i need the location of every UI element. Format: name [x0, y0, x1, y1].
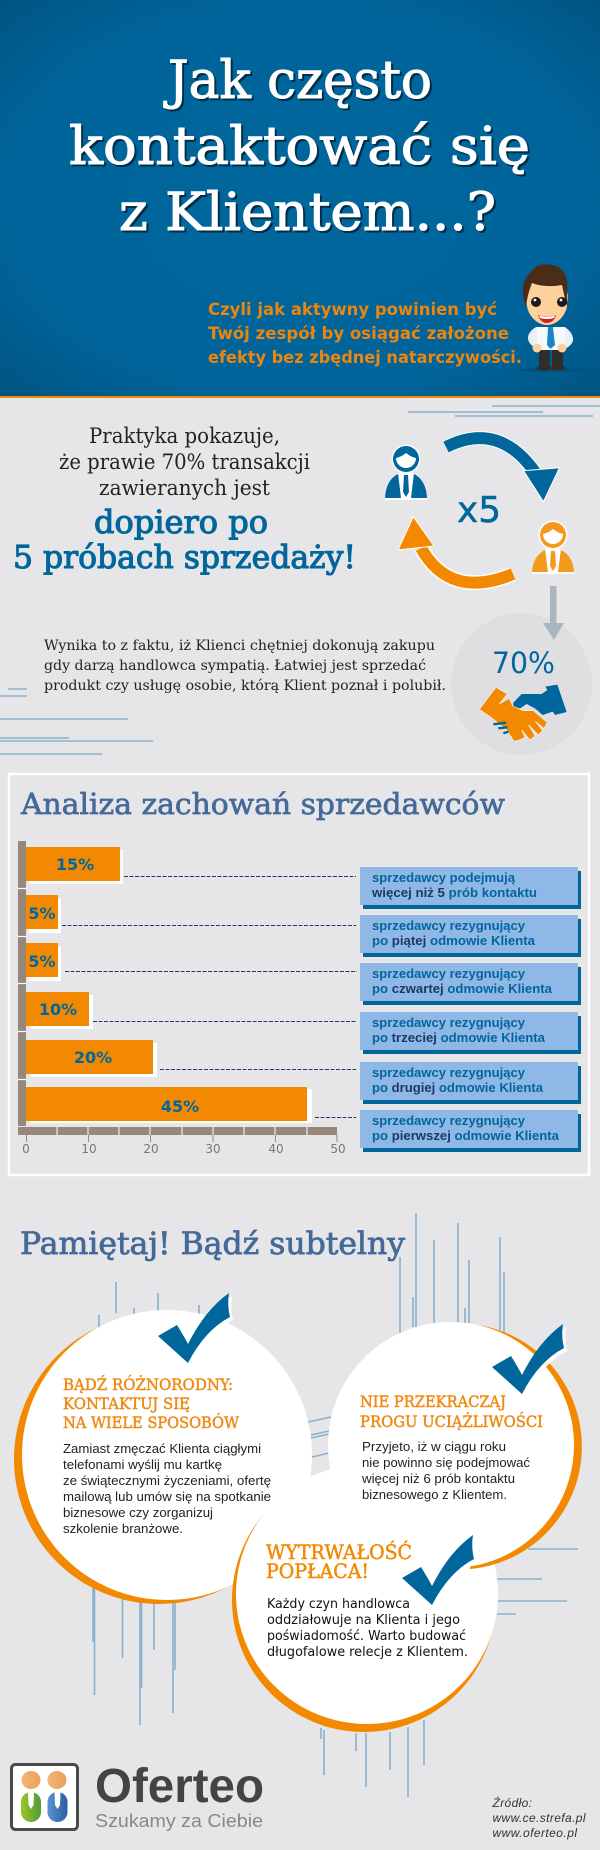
- bubble 1 text: ze świątecznymi życzeniami, ofertę: [63, 1473, 271, 1488]
- source note: Źródło:: [492, 1795, 532, 1810]
- bubble 3 text: długofalowe relecje z Klientem.: [267, 1645, 468, 1660]
- bubble 1 text: telefonami wyślij mu kartkę: [63, 1457, 222, 1472]
- source note: [492, 1795, 586, 1840]
- intro text: zawieranych jest: [99, 476, 271, 500]
- bar chart: 20%: [74, 1048, 112, 1067]
- icon: orange person: [532, 520, 574, 574]
- bubble 3 text: WYTRWAŁOŚĆ: [266, 1539, 412, 1564]
- icon: check mark 1: [158, 1293, 233, 1366]
- 70 percent label: 70%: [492, 646, 555, 680]
- title: Jak często: [163, 51, 432, 111]
- legend boxes: więcej niż 5 prób kontaktu: [371, 885, 537, 900]
- bubble 1 text: mailową lub umów się na spotkanie: [63, 1489, 271, 1504]
- title: [69, 51, 530, 243]
- bar chart: 0: [22, 1142, 30, 1156]
- bubble 2 text: nie powinno się podejmować: [362, 1455, 530, 1470]
- logo wordmark: Oferteo: [95, 1760, 264, 1813]
- bubble 1 text: [63, 1374, 271, 1536]
- bubble 3 text: POPŁACA!: [266, 1559, 369, 1583]
- explanation paragraph: produkt czy usługę osobie, którą Klient poznał i polubił.: [44, 678, 446, 694]
- bar chart: 15%: [56, 855, 94, 874]
- arrow: orange curved: [398, 517, 513, 583]
- bubble: prog uciazliwosci background: [328, 1322, 582, 1569]
- subtitle: [208, 300, 522, 367]
- bubble: rozne sposoby: [14, 1310, 312, 1604]
- source note: www.oferteo.pl: [492, 1826, 577, 1840]
- legend boxes: po pierwszej odmowie Klienta: [372, 1128, 560, 1143]
- logo icon: [12, 1764, 78, 1830]
- header banner: [0, 0, 600, 398]
- bar chart: [18, 841, 357, 1156]
- intro text: [59, 424, 310, 500]
- legend boxes: po czwartej odmowie Klienta: [372, 981, 553, 996]
- bubble 1 text: KONTAKTUJ SIĘ: [63, 1394, 190, 1413]
- bubble 2 text: Przyjeto, iż w ciągu roku: [362, 1439, 506, 1454]
- bubble 3 text: poświadomość. Warto budować: [267, 1629, 466, 1644]
- bubble 3 text: oddziałowuje na Klienta i jego: [267, 1613, 460, 1628]
- legend boxes: sprzedawcy rezygnujący: [372, 966, 526, 981]
- panel: analiza zachowan: [9, 774, 589, 1175]
- subtitle: efekty bez zbędnej natarczywości.: [208, 348, 522, 367]
- bar chart: 10%: [39, 1000, 77, 1019]
- legend boxes: sprzedawcy rezygnujący: [372, 1113, 526, 1128]
- bubble 2 text: NIE PRZEKRACZAJ: [360, 1392, 506, 1411]
- explanation paragraph: gdy darzą handlowca sympatią. Łatwiej jest sprzedać: [44, 658, 426, 674]
- bubble 1 text: NA WIELE SPOSOBÓW: [63, 1412, 240, 1432]
- x5 label: x5: [457, 490, 501, 531]
- subtitle: Czyli jak aktywny powinien być: [208, 300, 497, 319]
- bubble 1 text: BĄDŹ RÓŻNORODNY:: [63, 1374, 233, 1394]
- intro text: że prawie 70% transakcji: [59, 450, 310, 474]
- decorative streaks: [0, 406, 600, 1797]
- bubble 2 text: więcej niż 6 prób kontaktu: [361, 1471, 515, 1486]
- legend boxes: sprzedawcy rezygnujący: [372, 1065, 526, 1080]
- bubble 1 text: biznesowe czy zorganizuj: [63, 1505, 213, 1520]
- bubble 3 text: [266, 1539, 468, 1660]
- logo wordmark: Szukamy za Ciebie: [95, 1811, 263, 1831]
- bubble 3 text: Każdy czyn handlowca: [267, 1597, 410, 1612]
- bar chart: 10: [81, 1142, 97, 1156]
- legend boxes: sprzedawcy rezygnujący: [372, 1015, 526, 1030]
- arrow: blue curved: [446, 438, 560, 502]
- section heading: Pamiętaj! Bądź subtelny: [20, 1226, 405, 1262]
- bar chart: 50: [330, 1142, 346, 1156]
- highlighted statement: [13, 503, 356, 576]
- icon: check mark 3: [402, 1535, 477, 1608]
- icon: cartoon businessman: [518, 264, 582, 372]
- panel heading: Analiza zachowań sprzedawców: [20, 787, 505, 821]
- bubble: wytrwalosc background: [232, 1464, 498, 1732]
- intro text: Praktyka pokazuje,: [89, 424, 280, 448]
- bar chart: 5%: [28, 952, 56, 971]
- bubble 1 text: Zamiast zmęczać Klienta ciągłymi: [63, 1441, 261, 1456]
- icon: handshake: [479, 685, 567, 741]
- explanation paragraph: Wynika to z faktu, iż Klienci chętniej dokonują zakupu: [44, 638, 435, 654]
- arrow: grey down: [543, 586, 564, 640]
- legend boxes: [360, 867, 581, 1152]
- source note: www.ce.strefa.pl: [492, 1811, 586, 1825]
- icon: check mark 2: [492, 1324, 567, 1397]
- icon: blue person: [385, 444, 427, 500]
- bar chart: 40: [268, 1142, 284, 1156]
- highlighted statement: 5 próbach sprzedaży!: [13, 538, 356, 576]
- highlighted statement: dopiero po: [94, 503, 268, 541]
- legend boxes: po trzeciej odmowie Klienta: [372, 1030, 546, 1045]
- bubble 2 text: PROGU UCIĄŻLIWOŚCI: [360, 1411, 543, 1431]
- bar chart: 45%: [161, 1097, 199, 1116]
- legend boxes: sprzedawcy podejmują: [372, 870, 516, 885]
- subtitle: Twój zespół by osiągać założone: [208, 324, 509, 343]
- title: kontaktować się: [69, 117, 530, 177]
- title: z Klientem...?: [119, 183, 496, 243]
- bar chart: 5%: [28, 904, 56, 923]
- legend boxes: po piątej odmowie Klienta: [372, 933, 536, 948]
- bar chart: 30: [205, 1142, 221, 1156]
- bubble 1 text: szkolenie branżowe.: [63, 1521, 183, 1536]
- bubble 2 text: biznesowego z Klientem.: [362, 1487, 507, 1502]
- bubble 2 text: [360, 1392, 543, 1502]
- legend boxes: sprzedawcy rezygnujący: [372, 918, 526, 933]
- legend boxes: po drugiej odmowie Klienta: [372, 1080, 544, 1095]
- bar chart: 20: [143, 1142, 159, 1156]
- circle: 70 percent: [451, 613, 592, 755]
- explanation paragraph: [44, 638, 446, 694]
